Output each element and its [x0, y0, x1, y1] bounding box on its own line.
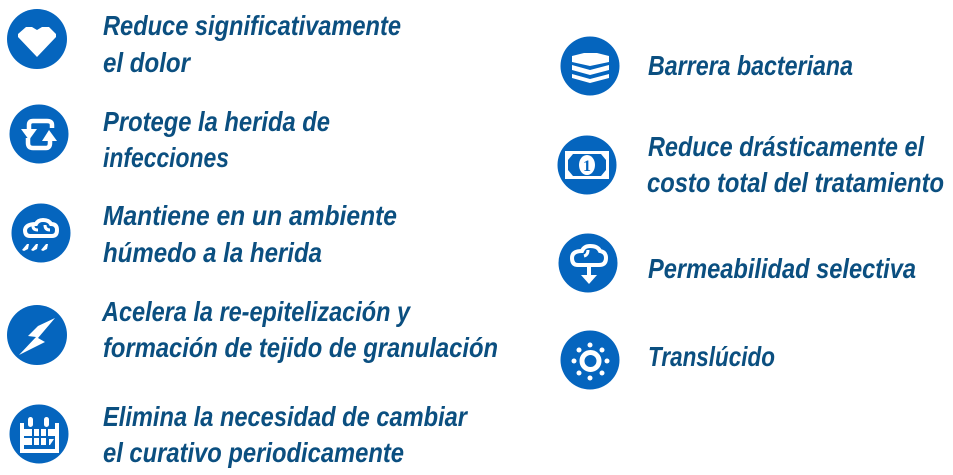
text: protects wound: Protege la herida de [103, 106, 330, 137]
icon: cloud download [558, 234, 618, 292]
text: reduce pain: el dolor [103, 47, 192, 78]
text: humid environment: Mantiene en un ambiente [103, 200, 397, 231]
text: humid environment: húmedo a la herida [103, 237, 322, 268]
icon: banknote: 1 [583, 158, 591, 175]
text: no dressing changes: Elimina la necesidad de cambiar [103, 401, 469, 432]
text: no dressing changes: el curativo periodicamente [103, 437, 404, 468]
text: reduce pain: Reduce significativamente [103, 10, 401, 41]
icon: lightning bolt [7, 305, 67, 365]
text: reduces total cost [647, 131, 944, 198]
icon: sun [560, 330, 620, 390]
icon: rain cloud [12, 204, 70, 262]
icon: refresh arrows [10, 104, 68, 164]
icon: banknote [558, 136, 616, 194]
text: accelerates healing: Acelera la re-epitelización y [101, 296, 411, 327]
text: protects wound: infecciones [103, 142, 229, 173]
text: humid environment [103, 200, 397, 268]
text: protects wound [103, 106, 330, 173]
icon: calendar [10, 404, 68, 464]
text: no dressing changes [103, 401, 469, 468]
text: accelerates healing: formación de tejido de granulación [103, 332, 498, 363]
text: accelerates healing [101, 296, 498, 363]
icon: layers [560, 36, 620, 96]
text: bacterial barrier: Barrera bacteriana [648, 50, 853, 81]
text: reduce pain [103, 10, 401, 78]
text: translucent: Translúcido [648, 341, 775, 372]
icon: heart [7, 9, 67, 69]
